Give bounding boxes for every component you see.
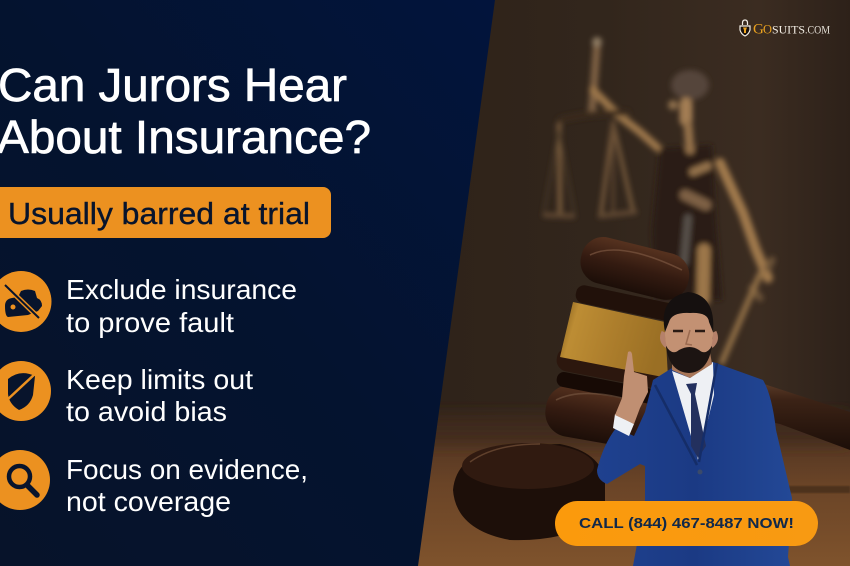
ears [663, 332, 715, 346]
beard [666, 346, 712, 373]
statue of Lady Justice with scales (blurred) [544, 37, 772, 362]
logo: GoSuits.com: O [763, 22, 772, 36]
title: Can Jurors Hear [0, 59, 347, 111]
hand with pointing finger [615, 351, 648, 424]
lapel lines [655, 363, 717, 465]
subtitle badge: Usually barred at trial [8, 196, 310, 231]
nose shading [686, 330, 692, 345]
gavel handle [725, 372, 850, 450]
gavel sound block [453, 443, 605, 540]
gavel head [541, 232, 694, 455]
logo: GoSuits.com: .COM [805, 24, 830, 36]
item: focus on evidence [0, 450, 308, 517]
item: focus on evidence: not coverage [66, 486, 231, 517]
item: keep limits out: Keep limits out [66, 364, 253, 395]
icon: slashed shield [0, 361, 51, 421]
photo background: courtroom wall and table [400, 0, 850, 566]
title [0, 59, 371, 163]
neck [672, 352, 712, 378]
item: focus on evidence: Focus on evidence, [66, 454, 308, 485]
logo: GoSuits.com: G [753, 22, 764, 38]
suit jacket [597, 362, 792, 566]
item: exclude insurance: to prove fault [66, 307, 234, 338]
subtitle badge [0, 187, 331, 238]
call-to-action button: CALL (844) 467-8487 NOW! [579, 515, 794, 532]
shirt cuff [613, 414, 634, 436]
icon: magnifying glass [0, 450, 50, 510]
title: About Insurance? [0, 111, 371, 163]
hair [664, 292, 713, 332]
jacket button [698, 470, 702, 474]
logo: GoSuits.com [740, 20, 830, 38]
item: exclude insurance [0, 271, 297, 338]
necktie [686, 383, 706, 458]
eyes [673, 330, 705, 332]
icon: crossed-out car [0, 271, 52, 332]
icon: logo shield lock [740, 20, 750, 36]
logo: GoSuits.com: SUITS [772, 22, 805, 36]
call-to-action button [555, 501, 818, 546]
item: keep limits out [0, 361, 253, 427]
item: keep limits out: to avoid bias [66, 396, 227, 427]
item: exclude insurance: Exclude insurance [66, 274, 297, 305]
shirt and collar [672, 362, 714, 460]
head [665, 301, 713, 367]
attorney figure [597, 292, 792, 566]
panel: navy text panel [0, 0, 495, 566]
